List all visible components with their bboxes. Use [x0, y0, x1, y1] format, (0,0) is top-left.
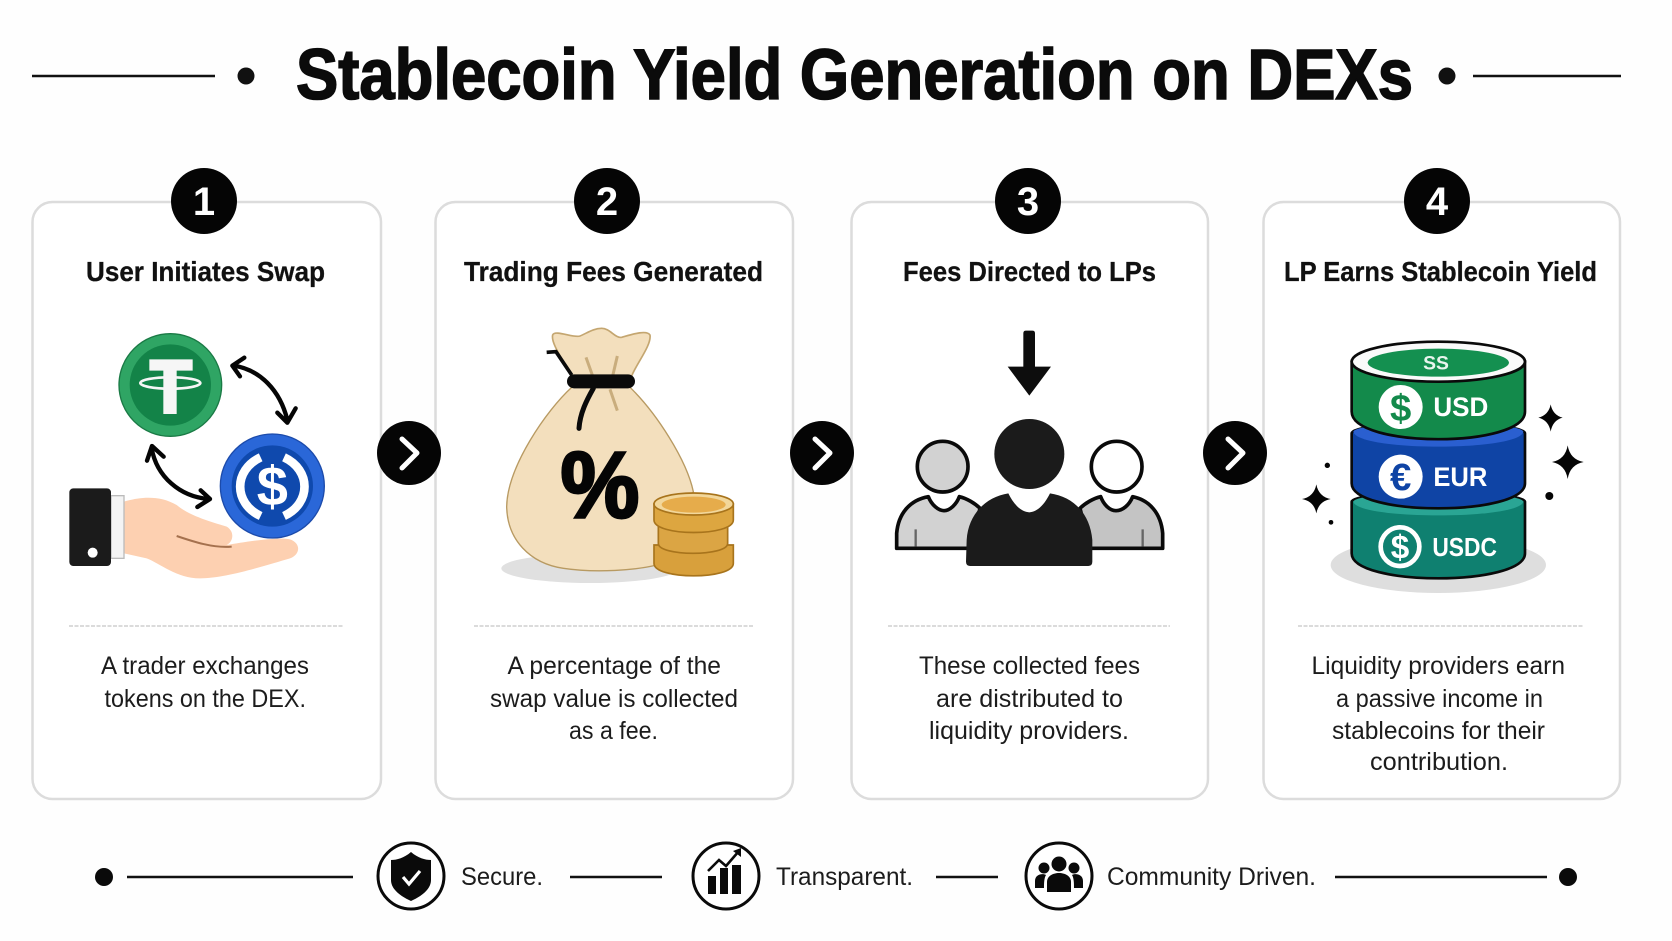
step number 2: [574, 168, 640, 234]
description: step 4: [1312, 652, 1565, 776]
heading: trading fees generated: Trading Fees Generated: [464, 256, 763, 287]
step number 3: [995, 168, 1061, 234]
panel: step 1 user initiates swap: [32, 168, 381, 799]
step number 1: [171, 168, 237, 234]
icon: stack of USD EUR USDC coins: USDC: [1432, 532, 1497, 562]
footer icon: growth chart: [693, 843, 759, 909]
description: step 4: Liquidity providers earn: [1312, 652, 1565, 680]
description: step 3: [919, 652, 1140, 745]
footer label: transparent: Transparent.: [776, 863, 913, 891]
step number 4: [1404, 168, 1470, 234]
footer icon: community: [1026, 843, 1092, 909]
description: step 2: [490, 652, 738, 745]
icon: stack of USD EUR USDC coins: USD: [1433, 392, 1488, 422]
step number 3: 3: [1017, 180, 1039, 224]
icon: arrow pointing to liquidity providers: [897, 331, 1163, 566]
icon: stack of USD EUR USDC coins: EUR: [1433, 462, 1487, 492]
step number 2: 2: [596, 180, 618, 224]
panel: step 3 fees directed to LPs: [852, 168, 1208, 799]
footer icon: shield: [378, 843, 444, 909]
description: step 3: are distributed to: [936, 685, 1123, 713]
title: Stablecoin Yield Generation on DEXs: [296, 36, 1413, 115]
description: step 2: as a fee.: [569, 717, 658, 745]
icon: hand with swapping stablecoins: $: [257, 454, 288, 517]
footer label: secure: Secure.: [461, 863, 543, 891]
description: step 3: These collected fees: [919, 652, 1140, 680]
description: step 2: swap value is collected: [490, 685, 738, 713]
icon: stack of USD EUR USDC coins: $: [1391, 530, 1410, 567]
icon: stack of USD EUR USDC coins: $: [1390, 387, 1411, 430]
footer strip: [95, 843, 1577, 909]
heading: LP earns stablecoin yield: LP Earns Stablecoin Yield: [1284, 256, 1597, 287]
description: step 1: [101, 652, 309, 713]
description: step 4: contribution.: [1370, 748, 1508, 776]
icon: stack of USD EUR USDC coins: SS: [1423, 353, 1449, 374]
heading: user initiates swap: User Initiates Swap: [86, 256, 325, 287]
icon: stack of USD EUR USDC coins: €: [1390, 456, 1411, 499]
description: step 4: stablecoins for their: [1332, 717, 1545, 745]
arrow: step 1 to 2: [377, 421, 441, 485]
step number 4: 4: [1426, 180, 1449, 224]
panel: step 4 LP earns stablecoin yield: [1264, 168, 1620, 799]
description: step 3: liquidity providers.: [929, 717, 1129, 745]
description: step 1: tokens on the DEX.: [104, 685, 306, 713]
icon: money bag with coins: %: [561, 433, 639, 537]
icon: money bag with coins: [501, 328, 733, 583]
icon: stack of USD EUR USDC coins: [1302, 342, 1584, 593]
arrow: step 3 to 4: [1203, 421, 1267, 485]
description: step 2: A percentage of the: [508, 652, 721, 680]
description: step 1: A trader exchanges: [101, 652, 309, 680]
footer label: community driven: Community Driven.: [1107, 863, 1316, 891]
arrow: step 2 to 3: [790, 421, 854, 485]
icon: hand with swapping stablecoins: [69, 334, 324, 578]
panel: step 2 trading fees generated: [436, 168, 793, 799]
step number 1: 1: [193, 180, 215, 224]
heading: fees directed to LPs: Fees Directed to LPs: [903, 256, 1156, 287]
description: step 4: a passive income in: [1336, 685, 1543, 713]
